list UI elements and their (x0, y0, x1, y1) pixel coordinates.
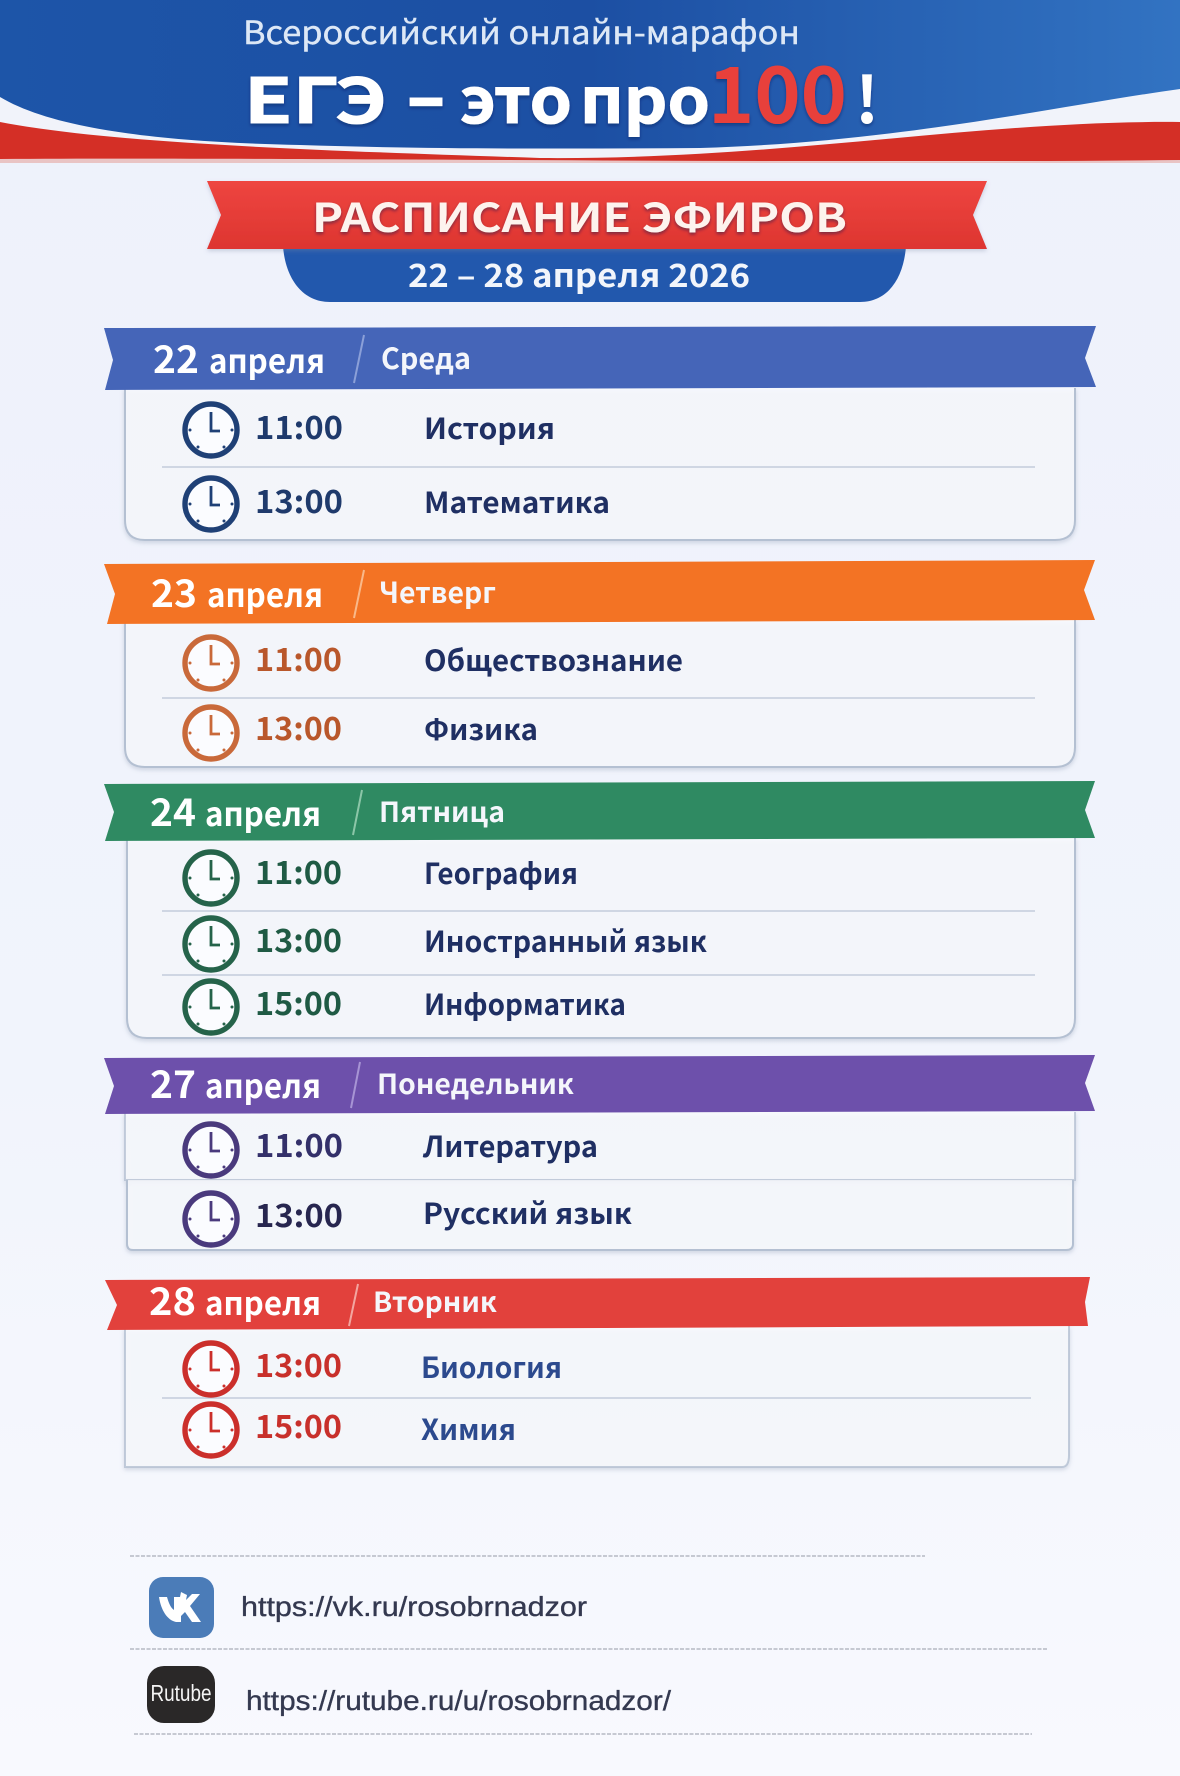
row: 13:00 Русский язык: 13:00 (255, 1191, 343, 1237)
heading text: РАСПИСАНИЕ ЭФИРОВ (312, 186, 847, 244)
row: 13:00 Иностранный язык (185, 916, 707, 970)
row: 11:00 Обществознание: Обществознание (424, 638, 683, 680)
row: 13:00 Математика: Математика (424, 480, 610, 522)
row: 11:00 Литература (185, 1121, 598, 1176)
icon: Rutube (147, 1666, 215, 1723)
row: 13:00 Математика: 13:00 (255, 477, 343, 523)
panel: 22 April (104, 326, 1096, 540)
row: 11:00 Обществознание: 11:00 (255, 635, 342, 681)
icon: Rutube: Rutube (150, 1680, 212, 1706)
row: 15:00 Химия: 15:00 (255, 1402, 342, 1448)
row: 13:00 Физика: 13:00 (255, 704, 342, 750)
header banner (0, 0, 1180, 163)
row: 13:00 Физика (185, 704, 538, 759)
band: 22 April (104, 326, 1096, 390)
Rutube link: https://rutube.ru/u/rosobrnadzor/ (246, 1685, 671, 1716)
row: 11:00 Литература: Литература (422, 1124, 598, 1166)
band: 28 April: апреля (205, 1279, 321, 1325)
row: 15:00 Химия: Химия (421, 1407, 516, 1449)
date range: 22 – 28 апреля 2026 (408, 251, 750, 297)
icon: VK (149, 1577, 214, 1638)
row: 13:00 Биология: Биология (421, 1345, 562, 1387)
row: 11:00 История: 11:00 (255, 403, 343, 449)
band: 23 April (104, 560, 1095, 624)
panel: 28 April (105, 1271, 1090, 1467)
row: 15:00 Химия (185, 1402, 516, 1456)
main title (244, 34, 879, 146)
band: 28 April (105, 1271, 1090, 1330)
row: 13:00 Русский язык (185, 1191, 632, 1245)
panel: 24 April (104, 781, 1095, 1038)
band: 24 April: 24 (150, 782, 196, 837)
row: 13:00 Математика (185, 477, 610, 530)
band: 22 April: апреля (209, 335, 325, 383)
band: 22 April: 22 (153, 329, 199, 384)
row: 11:00 География (185, 848, 578, 904)
row: 11:00 Литература: 11:00 (255, 1121, 343, 1167)
row: 13:00 Биология (185, 1341, 562, 1395)
band: 28 April: 28 (149, 1271, 196, 1326)
VK link: https://vk.ru/rosobrnadzor (241, 1591, 587, 1622)
main title: про (580, 51, 710, 142)
band: 23 April: апреля (207, 569, 323, 617)
row: 13:00 Физика: Физика (424, 707, 538, 749)
main title: – (408, 50, 444, 137)
band: 24 April (104, 781, 1095, 841)
band: 28 April: Вторник (373, 1281, 497, 1321)
band: 22 April: Среда (381, 336, 471, 378)
row: 11:00 География: 11:00 (255, 848, 342, 894)
row: 15:00 Информатика (185, 979, 626, 1033)
row: 13:00 Иностранный язык: 13:00 (255, 916, 342, 962)
row: 15:00 Информатика: Информатика (424, 982, 626, 1024)
row: 11:00 История (185, 403, 555, 456)
band: 27 April (104, 1054, 1095, 1114)
main title: ! (855, 50, 879, 142)
schedule heading ribbon (207, 181, 987, 302)
band: 27 April: апреля (205, 1060, 321, 1108)
row: 13:00 Биология: 13:00 (255, 1341, 342, 1387)
row: 13:00 Иностранный язык: Иностранный язык (424, 919, 707, 961)
main title: это (460, 51, 572, 142)
band: 23 April: Четверг (379, 570, 496, 612)
subtitle: Всероссийский онлайн-марафон (243, 8, 800, 54)
row: 11:00 История: История (424, 406, 555, 448)
row: 13:00 Русский язык: Русский язык (423, 1191, 632, 1233)
panel: 23 April (104, 560, 1095, 767)
band: 27 April: 27 (150, 1054, 196, 1109)
row: 15:00 Информатика: 15:00 (255, 979, 342, 1025)
main title: 100 (708, 34, 847, 146)
band: 27 April: Понедельник (377, 1063, 574, 1103)
row: 11:00 Обществознание (185, 635, 683, 689)
band: 24 April: Пятница (379, 791, 505, 831)
panel: 27 April (104, 1054, 1095, 1250)
band: 24 April: апреля (205, 788, 321, 836)
main title: ЕГЭ (244, 51, 387, 141)
row: 11:00 География: География (424, 851, 578, 893)
band: 23 April: 23 (151, 563, 197, 618)
footer links (130, 1556, 1047, 1734)
